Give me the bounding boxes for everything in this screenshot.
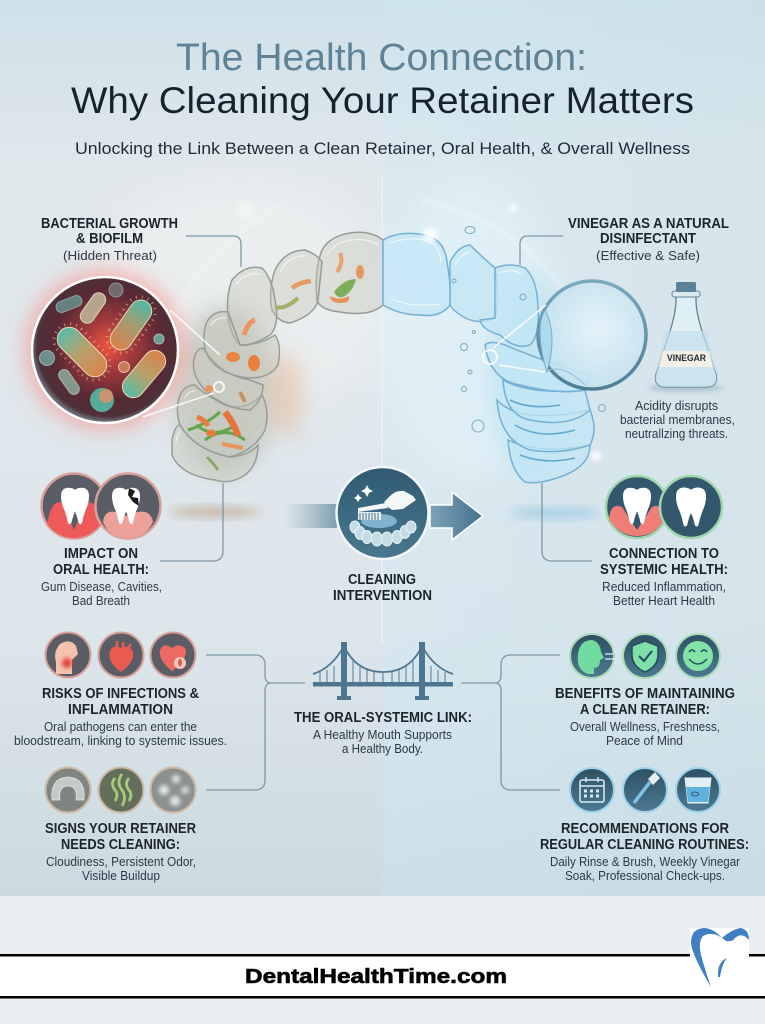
text: risks of infections: INFLAMMATION (68, 702, 173, 718)
footer band (0, 954, 765, 998)
connector: bacterial heading to retainer (186, 236, 241, 267)
text: connection to systemic health: CONNECTION TO (609, 546, 719, 562)
heading: bacterial growth: (Hidden Threat) (63, 249, 157, 263)
icon: visible buildup (150, 768, 196, 812)
icon: vinegar bottle (648, 282, 724, 392)
icon: smile (676, 634, 720, 678)
clean retainer half (383, 228, 601, 483)
heading: bacterial growth: & BIOFILM (76, 231, 143, 247)
footer website text: DentalHealthTime.com (245, 966, 507, 988)
text: cleaning intervention (333, 572, 432, 604)
connector: retainer to systemic health (542, 483, 592, 561)
dirty retainer half (172, 232, 383, 482)
icon: heart anatomy (98, 632, 144, 678)
text: signs retainer needs cleaning (45, 821, 196, 883)
icon: cleaning intervention (336, 467, 428, 559)
text: risks of infections (14, 686, 227, 748)
text: benefits: Peace of Mind (606, 734, 683, 748)
text: impact on oral health (41, 546, 162, 608)
bracket: left branch (206, 655, 305, 790)
heading: bacterial growth (41, 216, 178, 263)
text: vinegar description: neutrallzing threats. (625, 427, 728, 441)
connector: retainer to oral health (160, 483, 223, 561)
text: vinegar description (620, 399, 735, 441)
text: impact on oral health: ORAL HEALTH: (53, 562, 149, 578)
text: risks of infections: bloodstream, linking to systemic issues. (14, 734, 227, 748)
center band (283, 504, 337, 528)
text: connection to systemic health: Reduced Inflammation, (602, 580, 726, 594)
text: recommendations: RECOMMENDATIONS FOR (561, 821, 729, 837)
text: signs retainer needs cleaning: SIGNS YOUR RETAINER (45, 821, 196, 837)
bacterium upper right (105, 296, 156, 355)
bacterium lower right (122, 350, 166, 398)
text: impact on oral health: Bad Breath (72, 594, 130, 608)
text: recommendations (540, 821, 749, 883)
arrow: cleaning direction (430, 492, 483, 540)
text: benefits (555, 686, 735, 748)
magnifier: bacteria close-up (25, 270, 185, 430)
text: impact on oral health: IMPACT ON (64, 546, 138, 562)
icon: bridge (313, 642, 453, 700)
water droplets (452, 226, 606, 432)
text: oral-systemic link (294, 710, 472, 756)
text: impact on oral health: Gum Disease, Cavities, (41, 580, 162, 594)
icon: shield check (623, 634, 667, 678)
heading: vinegar: DISINFECTANT (600, 231, 696, 247)
icon: toothbrush (623, 768, 667, 812)
text: signs retainer needs cleaning: NEEDS CLEANING: (61, 837, 180, 853)
icon: healthy gum tooth (606, 476, 668, 538)
text: vinegar description: Acidity disrupts (635, 399, 718, 413)
text: signs retainer needs cleaning: Cloudiness, Persistent Odor, (46, 855, 196, 869)
icon: calendar (570, 768, 614, 812)
text: vinegar description: bacterial membranes, (620, 413, 735, 427)
icon: heart with flame (150, 632, 196, 678)
text: oral-systemic link: a Healthy Body. (342, 742, 423, 756)
icon: fresh breath (570, 634, 616, 678)
heading: vinegar (568, 216, 729, 263)
icon: logo tooth (690, 928, 749, 987)
icon: vinegar bottle: VINEGAR (667, 353, 706, 364)
footer background (0, 896, 765, 1024)
text: risks of infections: RISKS OF INFECTIONS & (42, 686, 199, 702)
text: connection to systemic health: Better Heart Health (613, 594, 715, 608)
icon: healthy white tooth (660, 476, 722, 538)
title: Why Cleaning Your Retainer Matters (71, 80, 694, 121)
text: risks of infections: Oral pathogens can enter the (44, 720, 197, 734)
bacteria spots on retainer (188, 253, 364, 470)
text: cleaning intervention: INTERVENTION (333, 588, 432, 604)
connector: vinegar heading to retainer (520, 236, 563, 265)
text: signs retainer needs cleaning: Visible Buildup (82, 869, 160, 883)
text: cleaning intervention: CLEANING (348, 572, 416, 588)
text: oral-systemic link: THE ORAL-SYSTEMIC LINK: (294, 710, 472, 726)
subtitle: Unlocking the Link Between a Clean Retainer, Oral Health, & Overall Wellness (75, 139, 690, 158)
callout lines from bacteria circle (143, 310, 224, 417)
text: recommendations: Soak, Professional Check-ups. (565, 869, 725, 883)
text: connection to systemic health (600, 546, 728, 608)
icon: gum disease tooth (42, 474, 106, 538)
heading: vinegar: (Effective & Safe) (596, 249, 700, 263)
icon: throat infection (46, 632, 90, 678)
icon: odor waves (98, 768, 144, 812)
text: benefits: A CLEAN RETAINER: (580, 702, 710, 718)
magnifier: clean lens (538, 281, 646, 389)
title (71, 37, 694, 121)
heading: vinegar: VINEGAR AS A NATURAL (568, 216, 729, 232)
icon: soak cup (676, 768, 720, 812)
icon: cloudy retainer (46, 768, 90, 812)
text: oral-systemic link: A Healthy Mouth Supports (313, 728, 452, 742)
title: The Health Connection: (176, 37, 587, 79)
text: benefits: BENEFITS OF MAINTAINING (555, 686, 735, 702)
icon: tooth with cavity (96, 474, 160, 538)
text: recommendations: Daily Rinse & Brush, Weekly Vinegar (550, 855, 740, 869)
text: connection to systemic health: SYSTEMIC HEALTH: (600, 562, 728, 578)
heading: bacterial growth: BACTERIAL GROWTH (41, 216, 178, 232)
soft shadows under retainer (170, 507, 600, 518)
bracket: right branch (461, 655, 560, 790)
bacterium large left (52, 322, 112, 382)
text: benefits: Overall Wellness, Freshness, (570, 720, 720, 734)
callout lines from lens (483, 305, 546, 372)
